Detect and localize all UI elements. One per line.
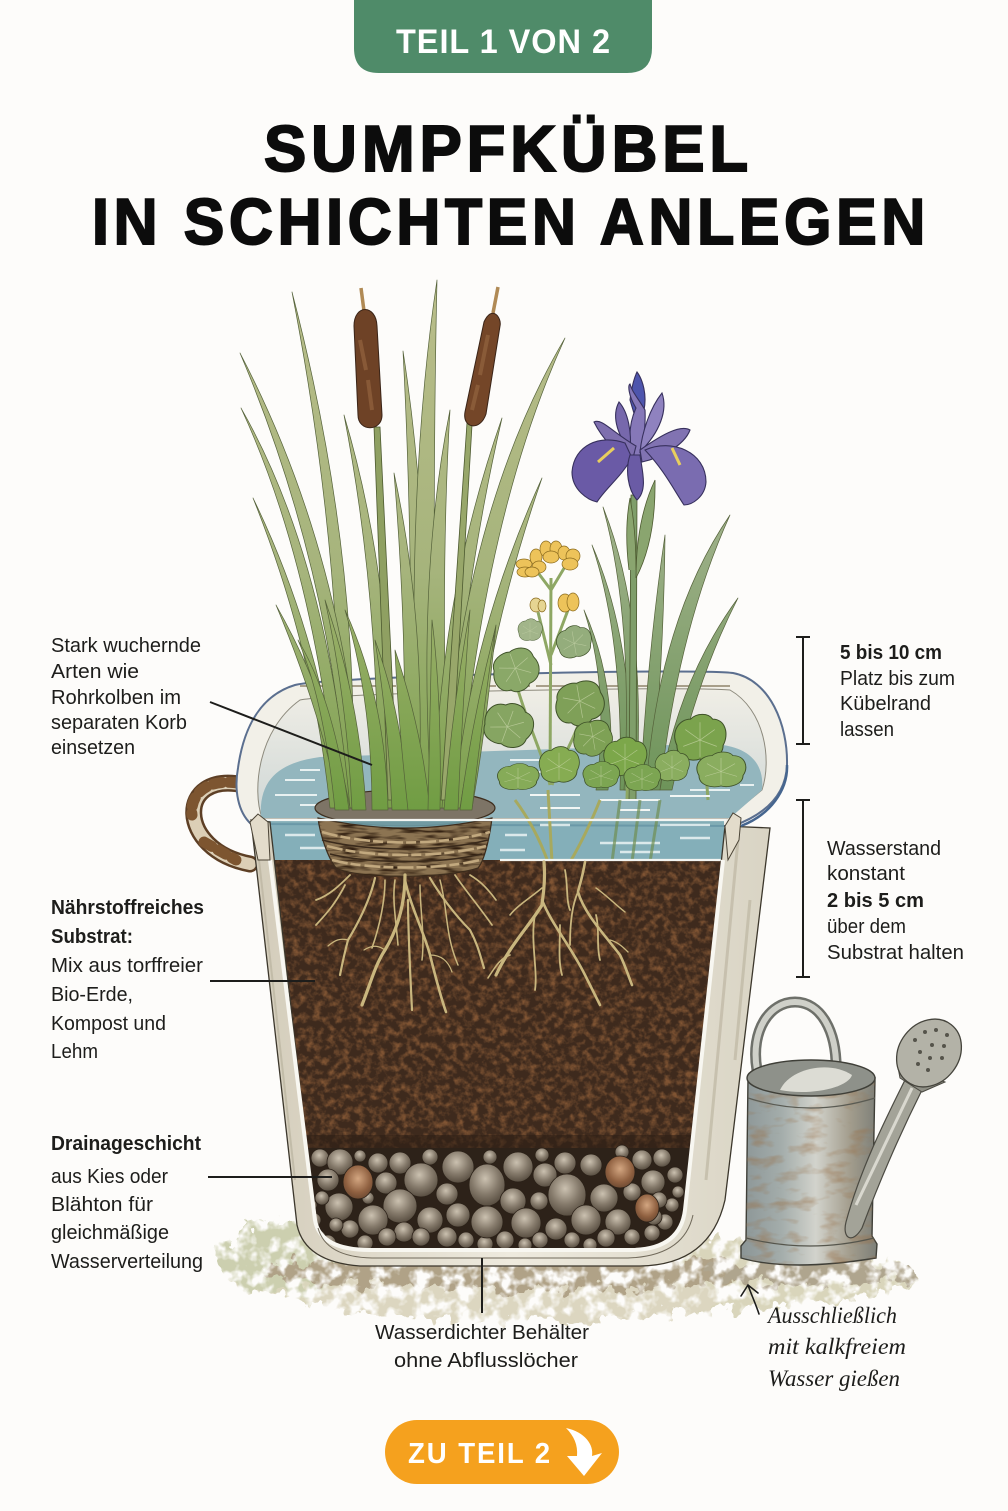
arrow icon (566, 1428, 602, 1476)
leader line: basket (210, 702, 372, 765)
label: rim space (840, 642, 955, 741)
iris stem (629, 495, 637, 800)
marsh marigold with round leaves (478, 541, 746, 800)
label: drainage layer (51, 1133, 203, 1273)
header tab: part 1 of 2 (354, 0, 652, 73)
label: nutrient-rich substrate: Nährstoffreiches (51, 897, 204, 919)
handwritten note: lime-free water (766, 1303, 906, 1391)
label: water level: über dem (827, 916, 906, 938)
marigold flowers (516, 541, 580, 612)
header tab: part 1 of 2: TEIL 1 VON 2 (396, 23, 611, 61)
can spout (845, 1080, 922, 1238)
leader line: drainage (208, 1176, 332, 1178)
water in cross section (266, 790, 724, 863)
label: nutrient-rich substrate (51, 897, 204, 1063)
right plant roots (488, 862, 632, 1005)
handwritten arrow (741, 1285, 759, 1314)
label: drainage layer: Drainageschicht (51, 1133, 201, 1155)
label: invasive species basket: Rohrkolben im (51, 687, 181, 709)
basket interior (315, 790, 495, 826)
soil layer (262, 860, 732, 1160)
label: water level: Substrat halten (827, 942, 964, 964)
leader line: container (481, 1258, 483, 1313)
title (92, 112, 930, 258)
bucket handle (192, 782, 250, 864)
label: drainage layer: aus Kies oder (51, 1166, 168, 1188)
cattails and blades (240, 280, 565, 810)
label: invasive species basket (51, 635, 201, 759)
iris flower (572, 372, 706, 505)
label: nutrient-rich substrate: Bio-Erde, (51, 984, 133, 1006)
wicker basket front (316, 816, 494, 880)
handwritten note: lime-free water: mit kalkfreiem (768, 1334, 906, 1359)
label: watertight container (375, 1322, 589, 1372)
label: invasive species basket: einsetzen (51, 737, 135, 759)
can rose (883, 1006, 975, 1100)
illustration: ground patch (218, 1222, 915, 1322)
cattail blades, rear (240, 280, 565, 808)
watering can (740, 1002, 975, 1270)
label: rim space: Kübelrand (840, 693, 931, 715)
title: IN SCHICHTEN ANLEGEN (92, 185, 930, 258)
label: nutrient-rich substrate: Lehm (51, 1041, 98, 1063)
iris leaves (584, 507, 738, 790)
handwritten note: lime-free water: Ausschließlich (766, 1303, 897, 1328)
label: invasive species basket: Stark wuchernde (51, 635, 201, 657)
drainage gravel layer (308, 1145, 690, 1248)
label: water level: konstant (827, 863, 905, 885)
button: to part 2: ZU TEIL 2 (408, 1438, 552, 1470)
bucket front walls (250, 765, 787, 1266)
can opening (747, 1060, 875, 1096)
leader line: substrate (210, 980, 315, 982)
label: water level (827, 838, 964, 964)
label: invasive species basket: Arten wie (51, 661, 139, 683)
roots (316, 862, 632, 1012)
label: drainage layer: Wasserverteilung (51, 1251, 203, 1273)
marigold stems (518, 565, 708, 800)
can rose cone (897, 1062, 945, 1092)
bracket: water level (796, 800, 810, 977)
handwritten note: lime-free water: Wasser gießen (768, 1366, 900, 1391)
label: water level: 2 bis 5 cm (827, 890, 924, 912)
iris spathe (627, 480, 655, 578)
back water surface (261, 744, 762, 818)
label: water level: Wasserstand (827, 838, 941, 860)
label: nutrient-rich substrate: Kompost und (51, 1013, 166, 1035)
button: to part 2 (385, 1420, 619, 1484)
label: nutrient-rich substrate: Substrat: (51, 926, 133, 948)
round leaves (478, 619, 746, 791)
label: drainage layer: gleichmäßige (51, 1222, 169, 1244)
label: rim space: Platz bis zum (840, 668, 955, 690)
cattail blades, front (298, 600, 495, 810)
water line highlights (262, 820, 726, 860)
label: rim space: lassen (840, 719, 894, 741)
label: nutrient-rich substrate: Mix aus torffreier (51, 955, 203, 977)
label: invasive species basket: separaten Korb (51, 712, 187, 734)
iris plant (572, 372, 738, 800)
title: SUMPFKÜBEL (264, 112, 753, 185)
label: watertight container: ohne Abflusslöcher (394, 1350, 578, 1372)
cattail stems and spikes (354, 287, 500, 800)
basket roots (316, 875, 496, 1012)
bracket: rim space (796, 637, 810, 744)
label: drainage layer: Blähton für (51, 1194, 153, 1216)
can body (741, 1078, 877, 1265)
label: watertight container: Wasserdichter Behälter (375, 1322, 589, 1344)
bucket back wall and rim (237, 671, 787, 826)
can handle (756, 1002, 836, 1075)
submerged stems (515, 790, 660, 862)
label: rim space: 5 bis 10 cm (840, 642, 942, 664)
